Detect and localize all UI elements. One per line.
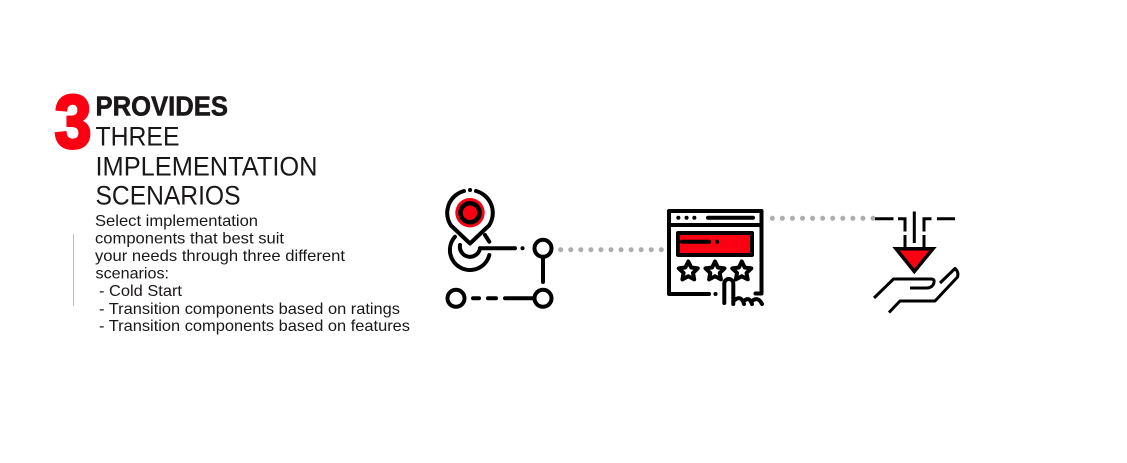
icon: location route [447,190,552,307]
body text: scenarios: [96,266,169,282]
icon: hand receiving recommendation [874,212,958,312]
dotted connector: route to ratings [561,247,662,252]
number 3: 3 [54,80,92,164]
icon: browser star ratings [669,211,762,304]
heading [96,90,318,210]
body text: Select implementation [95,213,258,230]
body text: components that best suit [95,230,285,248]
body text: - Transition components based on ratings [99,301,400,318]
heading: SCENARIOS [96,180,240,210]
body text: - Transition components based on features [99,318,410,335]
vertical rule [73,234,74,306]
heading: IMPLEMENTATION [96,152,318,182]
heading: THREE [96,122,180,152]
body text: your needs through three different [95,248,346,265]
dotted connector: ratings to hand [772,216,874,221]
heading: PROVIDES [96,90,228,122]
body text [95,213,410,335]
body text: - Cold Start [99,283,183,300]
